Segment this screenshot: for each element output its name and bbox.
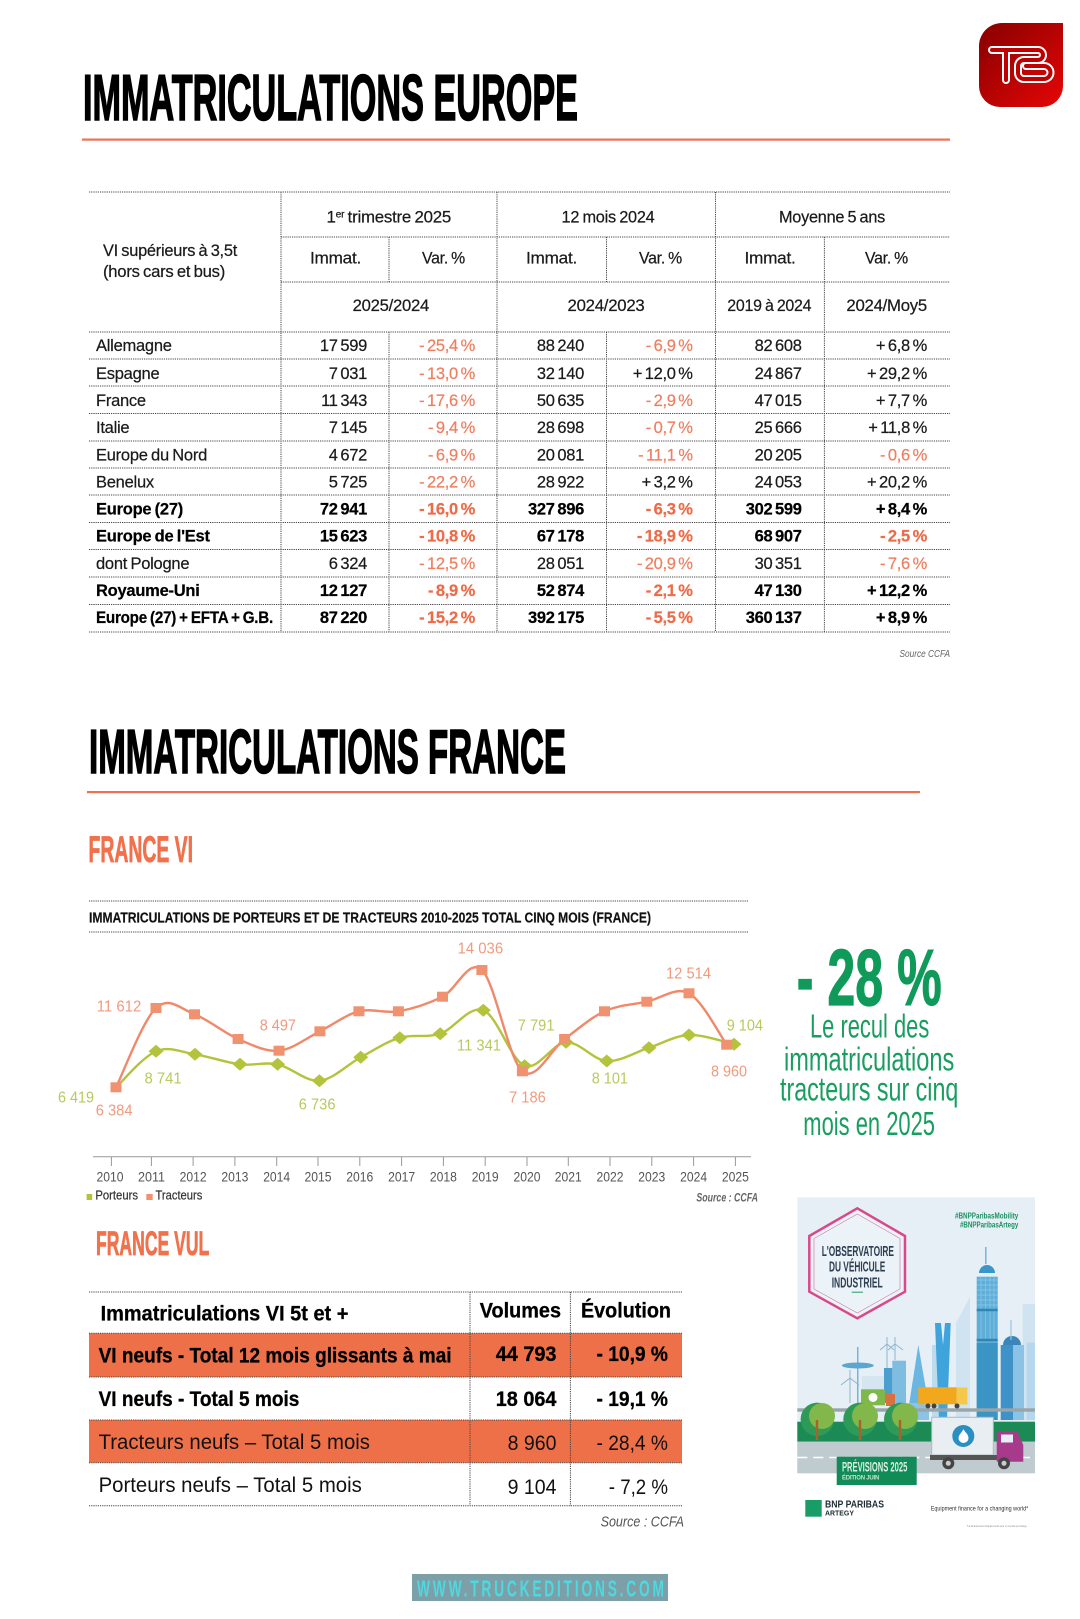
row: Europe (27) + EFTA + G.B.: - 15,2 % (419, 609, 476, 627)
data labels: 6 736 (299, 1096, 336, 1113)
row: France (96, 392, 928, 410)
banner: website: WWW.TRUCKEDITIONS.COM (417, 1577, 664, 1603)
row: Benelux: + 20,2 % (867, 474, 928, 492)
row: dont Pologne: - 7,6 % (880, 555, 928, 573)
x axis: 2024 (680, 1170, 708, 1185)
row: France: France (96, 392, 146, 410)
row: France: 11 343 (321, 392, 367, 410)
table 2 header: Évolution (581, 1299, 671, 1322)
callout: - 28 %: - 28 % (797, 933, 942, 1022)
x axis: 2011 (138, 1170, 165, 1185)
row: Europe (27): - 6,3 % (646, 500, 693, 518)
row: France: 47 015 (755, 392, 802, 410)
table header: Immat. (526, 250, 577, 268)
table header: Var. % (865, 250, 909, 268)
row: Italie: Italie (96, 419, 129, 437)
x axis: 2025 (722, 1170, 749, 1185)
row: Benelux: + 3,2 % (642, 474, 693, 492)
poster hexagon title: INDUSTRIEL (832, 1276, 883, 1292)
row: Europe (27) + EFTA + G.B.: Europe (27) + EFTA + G.B. (96, 609, 273, 627)
x axis: 2017 (388, 1170, 415, 1185)
x axis: 2015 (304, 1170, 332, 1185)
table header: (hors cars et bus) (103, 263, 225, 281)
data labels: 11 612 (97, 998, 141, 1015)
x axis: 2019 (472, 1170, 499, 1185)
data labels: 7 791 (518, 1018, 555, 1035)
x axis: 2010 (96, 1170, 124, 1185)
row: Europe du Nord: - 6,9 % (428, 446, 476, 464)
poster road (797, 1408, 1035, 1473)
row: Espagne: + 12,0 % (633, 365, 693, 383)
data labels: 8 741 (144, 1070, 182, 1087)
row: Royaume-Uni: 52 874 (537, 582, 585, 600)
title rule: Europe (82, 138, 950, 141)
row: VI neufs 5 mois: - 19,1 % (596, 1388, 668, 1411)
row: Porteurs neufs: - 7,2 % (609, 1476, 668, 1499)
heading: France VUL: FRANCE VUL (96, 1225, 209, 1263)
row: Europe de l'Est: 15 623 (320, 528, 367, 546)
row: Europe (27): Europe (27) (96, 500, 183, 518)
row: Europe de l'Est: Europe de l'Est (96, 528, 210, 546)
panel: France VUL table (89, 1292, 682, 1506)
row: Allemagne (96, 337, 928, 355)
data labels: 9 104 (727, 1018, 763, 1035)
row: Allemagne: - 25,4 % (419, 337, 476, 355)
table header: trimestre 2025 (344, 208, 451, 226)
row: Europe du Nord: Europe du Nord (96, 446, 207, 464)
row: Italie (96, 419, 928, 437)
row: dont Pologne (96, 555, 928, 573)
row: Europe (27): + 8,4 % (876, 500, 928, 518)
row: Espagne (96, 365, 928, 383)
legend: Tracteurs (156, 1188, 202, 1202)
row: Tracteurs neufs: 8 960 (508, 1432, 556, 1455)
row: Italie: 7 145 (329, 419, 367, 437)
row: Royaume-Uni: 47 130 (755, 582, 802, 600)
row: VI neufs 5 mois: VI neufs - Total 5 mois (99, 1388, 299, 1411)
row: Espagne: + 29,2 % (867, 365, 928, 383)
row: Benelux: Benelux (96, 474, 155, 492)
row: Europe de l'Est: - 10,8 % (419, 528, 476, 546)
data labels: 6 384 (96, 1103, 133, 1120)
row: Benelux: - 22,2 % (419, 474, 476, 492)
data labels: 7 186 (509, 1090, 546, 1107)
row: dont Pologne: 30 351 (755, 555, 802, 573)
row: VI neufs 12 mois: VI neufs - Total 12 mois glissants à mai (99, 1345, 452, 1368)
x axis (93, 1157, 751, 1185)
row: Allemagne: - 6,9 % (646, 337, 693, 355)
poster hexagon title: DU VÉHICULE (829, 1259, 885, 1276)
x axis: 2013 (221, 1170, 248, 1185)
row: Porteurs neufs: Porteurs neufs – Total 5 mois (99, 1474, 362, 1497)
row: Europe (27) + EFTA + G.B.: + 8,9 % (876, 609, 928, 627)
table header: Var. % (422, 250, 466, 268)
poster badge: Prévisions 2025: PRÉVISIONS 2025 (842, 1460, 908, 1475)
row: Espagne: 7 031 (329, 365, 367, 383)
x axis: 2023 (638, 1170, 665, 1185)
x axis: 2020 (514, 1170, 540, 1185)
table header: Immat. (744, 250, 796, 268)
row: Europe (27): 72 941 (320, 500, 367, 518)
poster hashtags: #BNPParibasArtegy (960, 1220, 1019, 1229)
row: Europe (27) + EFTA + G.B.: - 5,5 % (646, 609, 693, 627)
poster tagline (931, 1506, 1029, 1528)
poster box truck (930, 1417, 1023, 1469)
row: Europe de l'Est: - 2,5 % (880, 528, 928, 546)
callout: - 28 %: tracteurs sur cinq (780, 1071, 958, 1108)
line chart: porteurs et tracteurs (58, 901, 763, 1205)
row: Benelux: 24 053 (755, 474, 802, 492)
row: Benelux: 5 725 (329, 474, 367, 492)
source: Europe table: Source CCFA (900, 648, 950, 660)
row: Allemagne: 17 599 (320, 337, 367, 355)
data labels: 8 960 (711, 1064, 747, 1081)
x axis: 2022 (596, 1170, 624, 1185)
row: Italie: + 11,8 % (868, 419, 928, 437)
row: VI neufs 5 mois (99, 1388, 668, 1411)
data labels: 12 514 (666, 966, 711, 983)
table header: 12 mois 2024 (562, 208, 655, 226)
row: Europe du Nord: 20 081 (537, 446, 584, 464)
poster hashtags: #BNPParibasMobility (955, 1212, 1019, 1221)
row: Royaume-Uni: - 8,9 % (428, 582, 476, 600)
poster badge: Prévisions 2025 (837, 1457, 917, 1485)
row: Europe de l'Est: 67 178 (537, 528, 584, 546)
title: Immatriculations France: IMMATRICULATIONS FRANCE (89, 717, 566, 787)
legend: Porteurs (95, 1188, 138, 1202)
table 2 header: Immatriculations VI 5t et + (101, 1303, 348, 1326)
row: dont Pologne: - 12,5 % (419, 555, 476, 573)
row: Europe (27) (96, 500, 928, 518)
row: Europe (27): 327 896 (528, 500, 584, 518)
x axis: 2016 (346, 1170, 373, 1185)
row: Benelux: 28 922 (537, 474, 584, 492)
data labels: 11 341 (457, 1038, 501, 1055)
data labels: 14 036 (458, 940, 503, 957)
row: VI neufs 12 mois (99, 1343, 668, 1368)
row: Europe de l'Est: 68 907 (755, 528, 802, 546)
row: Italie: 28 698 (537, 419, 584, 437)
row: Italie: - 0,7 % (646, 419, 693, 437)
callout: - 28 %: mois en 2025 (803, 1105, 935, 1142)
legend (87, 1188, 202, 1202)
row: Royaume-Uni: - 2,1 % (646, 582, 693, 600)
panel: Europe table (89, 192, 950, 632)
poster BNP logo: ARTEGY (825, 1508, 854, 1518)
row: Italie: - 9,4 % (428, 419, 476, 437)
data labels: 8 497 (260, 1018, 296, 1035)
row: Europe (27): 302 599 (746, 500, 802, 518)
poster: Observatoire du véhicule industriel (797, 1197, 1035, 1528)
x axis: 2014 (263, 1170, 291, 1185)
row: Europe (27) + EFTA + G.B. (96, 609, 928, 627)
row: dont Pologne: 28 051 (537, 555, 584, 573)
row: Europe (27) + EFTA + G.B.: 392 175 (528, 609, 584, 627)
row: Espagne: - 13,0 % (419, 365, 476, 383)
poster trees (801, 1403, 918, 1440)
row: VI neufs 12 mois: - 10,9 % (596, 1343, 668, 1366)
row: Tracteurs neufs: Tracteurs neufs – Total 5 mois (99, 1431, 370, 1454)
poster tagline: Equipment finance for a changing world* (931, 1506, 1029, 1513)
poster skyline (841, 1247, 1035, 1420)
row: Europe du Nord: - 0,6 % (880, 446, 928, 464)
title rule: France (87, 791, 920, 793)
row: Royaume-Uni: Royaume-Uni (96, 582, 200, 600)
row: Europe du Nord: 4 672 (329, 446, 367, 464)
table header: 1 (326, 208, 335, 226)
row: Porteurs neufs: 9 104 (508, 1476, 557, 1499)
row: Espagne: 32 140 (537, 365, 584, 383)
table header: Moyenne 5 ans (779, 208, 885, 226)
poster hashtags (955, 1212, 1019, 1229)
table 2 header (101, 1299, 671, 1326)
row: Europe du Nord (96, 446, 928, 464)
data labels: 6 419 (58, 1090, 94, 1107)
table header: 2025/2024 (353, 297, 429, 315)
row: France: - 2,9 % (646, 392, 693, 410)
row: Tracteurs neufs: - 28,4 % (596, 1432, 668, 1455)
row: Royaume-Uni: 12 127 (320, 582, 367, 600)
x axis: 2021 (555, 1170, 582, 1185)
title: Immatriculations Europe: IMMATRICULATIONS EUROPE (83, 61, 578, 134)
data labels: 8 101 (592, 1070, 628, 1087)
table header: 2024/Moy5 (846, 297, 927, 315)
row: Espagne: 24 867 (755, 365, 802, 383)
table 2 header: Volumes (480, 1299, 561, 1322)
table header: 2024/2023 (568, 297, 645, 315)
row: Europe de l'Est (96, 528, 928, 546)
series: Tracteurs (110, 965, 732, 1092)
row: France: - 17,6 % (419, 392, 476, 410)
poster hexagon title: L'OBSERVATOIRE (822, 1244, 894, 1260)
row: dont Pologne: - 20,9 % (637, 555, 693, 573)
row: VI neufs 12 mois: 44 793 (496, 1343, 556, 1366)
row: dont Pologne: 6 324 (329, 555, 367, 573)
source: chart: Source : CCFA (696, 1191, 758, 1205)
table header: er (336, 209, 345, 220)
row: dont Pologne: dont Pologne (96, 555, 189, 573)
poster BNP logo (805, 1500, 884, 1518)
row: VI neufs 5 mois: 18 064 (496, 1388, 557, 1411)
row: Europe de l'Est: - 18,9 % (637, 528, 693, 546)
logo: TE (979, 23, 1063, 107)
callout: - 28 %: Le recul des (810, 1007, 929, 1044)
callout: - 28 %: immatriculations (784, 1041, 954, 1078)
row: Royaume-Uni (96, 582, 928, 600)
row: Europe (27): - 16,0 % (419, 500, 476, 518)
row: Espagne: Espagne (96, 365, 159, 383)
row: Benelux (96, 474, 928, 492)
row: Tracteurs neufs (99, 1431, 668, 1455)
row: Italie: 25 666 (755, 419, 802, 437)
table header: Var. % (639, 250, 683, 268)
row: Porteurs neufs (99, 1474, 668, 1499)
heading: France VI: FRANCE VI (88, 829, 193, 870)
row: Europe (27) + EFTA + G.B.: 87 220 (320, 609, 367, 627)
x axis: 2012 (180, 1170, 207, 1185)
table header (103, 208, 927, 315)
series: Porteurs (116, 1004, 742, 1087)
data labels (58, 940, 763, 1120)
poster trucks on overpass (861, 1387, 967, 1408)
row: Europe (27) + EFTA + G.B.: 360 137 (746, 609, 802, 627)
row: Europe du Nord: - 11,1 % (638, 446, 693, 464)
callout: - 28 % (780, 933, 958, 1142)
poster tagline: *La Financement d'équipements pour un monde qui change (967, 1524, 1027, 1528)
x axis: 2018 (430, 1170, 457, 1185)
row: Allemagne: 82 608 (755, 337, 802, 355)
row: France: 50 635 (537, 392, 584, 410)
table header: 2019 à 2024 (727, 297, 811, 315)
table header: VI supérieurs à 3,5t (103, 242, 238, 260)
row: Allemagne: + 6,8 % (876, 337, 928, 355)
poster hexagon title (809, 1208, 905, 1318)
row: Allemagne: 88 240 (537, 337, 584, 355)
table header: Immat. (310, 250, 361, 268)
poster BNP logo: BNP PARIBAS (825, 1500, 884, 1510)
source: VUL table: Source : CCFA (601, 1514, 684, 1531)
row: Allemagne: Allemagne (96, 337, 172, 355)
chart title: IMMATRICULATIONS DE PORTEURS ET DE TRACTEURS 2010-2025 TOTAL CINQ MOIS (FRANCE) (89, 911, 651, 927)
row: France: + 7,7 % (876, 392, 928, 410)
poster badge: Prévisions 2025: ÉDITION JUIN (842, 1473, 879, 1481)
row: Europe du Nord: 20 205 (755, 446, 802, 464)
row: Royaume-Uni: + 12,2 % (867, 582, 928, 600)
